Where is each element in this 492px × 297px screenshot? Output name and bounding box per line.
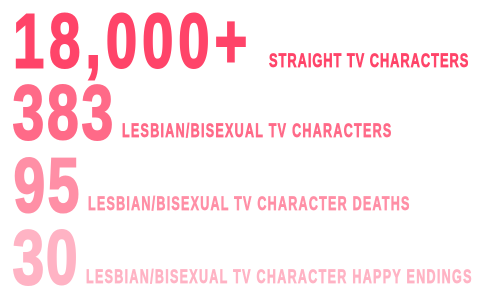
stat row: straight TV characters xyxy=(13,0,468,85)
label: lesbian/bisexual character deaths: LESBIAN/BISEXUAL TV CHARACTER DEATHS xyxy=(88,193,410,215)
stat row: lesbian/bisexual character deaths xyxy=(14,144,410,229)
number: 95: 95 xyxy=(14,144,79,229)
label: straight TV characters: STRAIGHT TV CHARACTERS xyxy=(269,49,468,72)
number: 18,000+: 18,000+ xyxy=(13,0,247,85)
stat row: lesbian/bisexual character happy endings xyxy=(12,216,472,297)
label: lesbian/bisexual TV characters: LESBIAN/BISEXUAL TV CHARACTERS xyxy=(122,120,391,142)
number: 383: 383 xyxy=(12,71,113,156)
stat row: lesbian/bisexual TV characters xyxy=(12,71,391,156)
label: lesbian/bisexual character happy endings: LESBIAN/BISEXUAL TV CHARACTER HAPPY ENDINGS xyxy=(86,266,472,288)
